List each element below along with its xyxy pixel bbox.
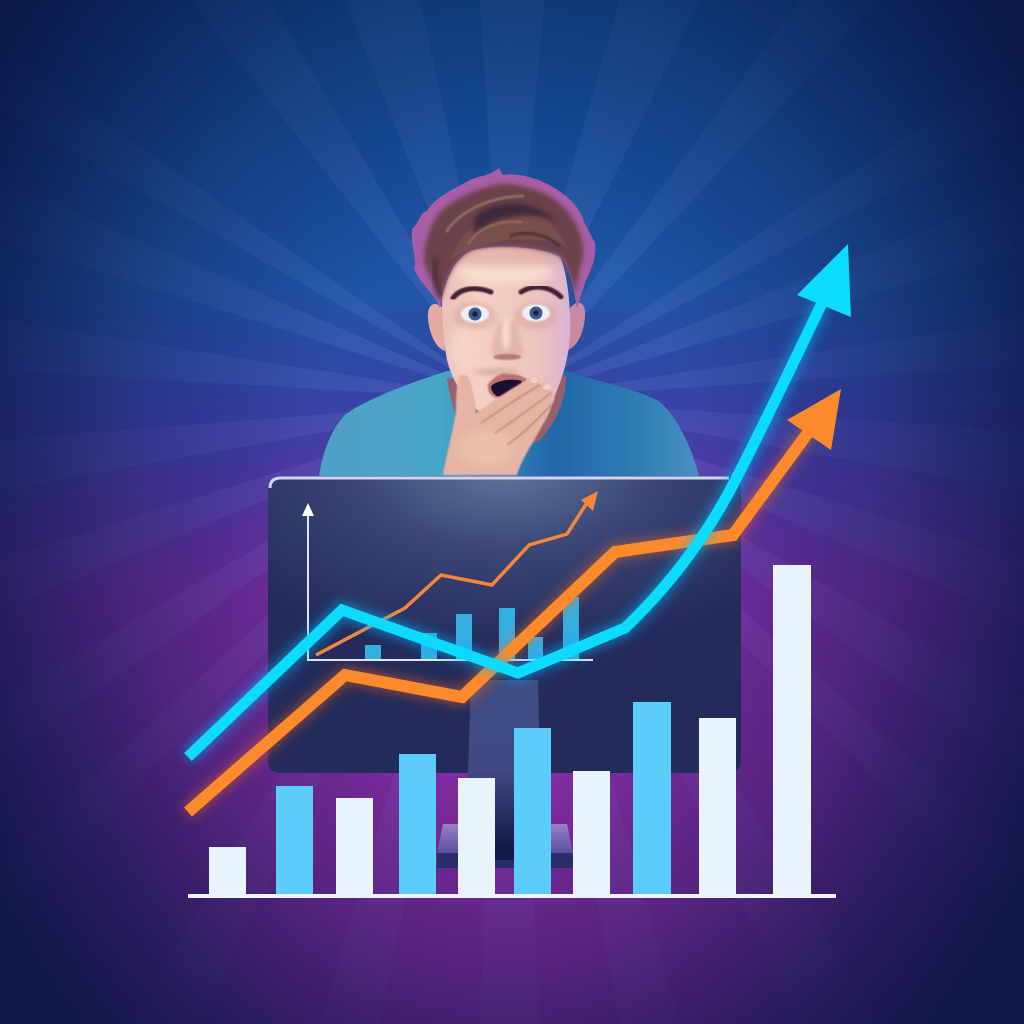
inner chart on screen xyxy=(302,491,598,660)
cheek and socket shading xyxy=(453,302,497,330)
monitor xyxy=(268,477,741,773)
face xyxy=(442,246,570,412)
cyan rising arrow xyxy=(188,244,851,757)
ears xyxy=(428,302,585,351)
inner bars xyxy=(365,597,579,659)
man: surprised person xyxy=(319,168,699,476)
mouth xyxy=(488,373,527,399)
inner orange trend line xyxy=(316,498,590,655)
inner axes xyxy=(308,514,593,660)
hair strands xyxy=(450,210,566,262)
hair mass xyxy=(424,184,583,300)
eyebrows xyxy=(453,287,561,298)
nose xyxy=(491,318,524,360)
eyes xyxy=(461,304,550,322)
bar chart xyxy=(188,565,836,898)
hair xyxy=(412,168,595,308)
monitor stand xyxy=(437,680,573,868)
neck xyxy=(447,376,566,442)
hand xyxy=(443,375,555,475)
hair rim xyxy=(412,168,595,308)
shirt xyxy=(319,371,699,476)
orange rising arrow xyxy=(188,389,841,812)
